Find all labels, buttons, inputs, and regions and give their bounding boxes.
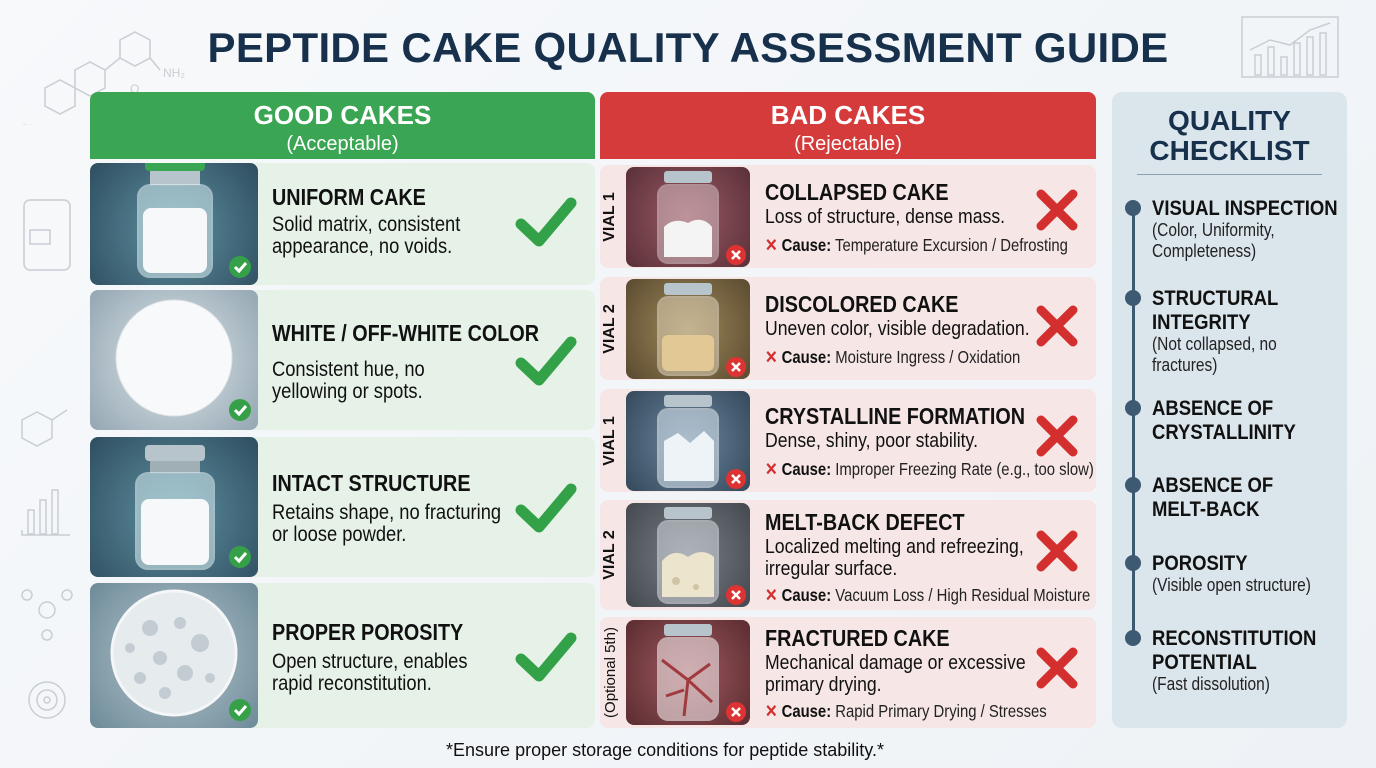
vial image: collapsed	[626, 167, 750, 267]
icon: check	[516, 484, 576, 532]
heading: MELT-BACK DEFECT	[765, 509, 965, 535]
panel: quality checklist: STRUCTURAL	[1152, 286, 1278, 310]
good row 1	[90, 163, 595, 285]
panel: quality checklist: POROSITY	[1152, 551, 1248, 575]
panel: quality checklist: (Color, Uniformity,	[1152, 220, 1275, 240]
vial label: (Optional 5th)	[602, 627, 619, 718]
item 5	[1125, 551, 1311, 595]
bad row 2	[600, 277, 1096, 380]
heading: COLLAPSED CAKE	[765, 179, 949, 205]
panel: quality checklist: (Not collapsed, no	[1152, 334, 1277, 354]
good row 3: Retains shape, no fracturing	[272, 500, 501, 524]
vial label: VIAL 1	[601, 416, 618, 465]
bad row 5: ✕ Cause: Rapid Primary Drying / Stresses	[765, 701, 1047, 721]
good row 1: appearance, no voids.	[272, 234, 452, 258]
bad row 3	[600, 389, 1096, 492]
header: good cakes	[90, 92, 595, 159]
heading: UNIFORM CAKE	[272, 184, 426, 210]
good row 3	[90, 437, 595, 577]
image: porous	[90, 583, 258, 728]
vial image: melt-back	[626, 503, 750, 607]
item 3	[1125, 396, 1296, 444]
panel: quality checklist: (Fast dissolution)	[1152, 674, 1270, 694]
bad row 3: Dense, shiny, poor stability.	[765, 429, 978, 452]
header: good cakes: GOOD CAKES	[254, 100, 431, 130]
icon: X	[1036, 530, 1078, 572]
panel: quality checklist: RECONSTITUTION	[1152, 626, 1316, 650]
icon: check	[516, 336, 576, 386]
bad row 4	[600, 500, 1096, 610]
image: white powder	[90, 290, 258, 430]
bad row 2: ✕ Cause: Moisture Ingress / Oxidation	[765, 347, 1020, 367]
footer note: *Ensure proper storage conditions for peptide stability.*	[446, 740, 884, 760]
bad row 2: Uneven color, visible degradation.	[765, 317, 1030, 340]
header: bad cakes: (Rejectable)	[794, 133, 902, 155]
icon: X	[1036, 648, 1078, 688]
panel: quality checklist: ABSENCE OF	[1152, 396, 1273, 420]
vial image: fractured	[626, 620, 750, 725]
bad row 5: Mechanical damage or excessive	[765, 651, 1026, 674]
vial image: crystalline	[626, 391, 750, 491]
heading: PROPER POROSITY	[272, 619, 463, 645]
heading: INTACT STRUCTURE	[272, 470, 471, 496]
good row 2	[90, 290, 595, 430]
title: PEPTIDE CAKE QUALITY ASSESSMENT GUIDE	[208, 24, 1168, 71]
panel: good cakes	[90, 92, 595, 159]
vial image: discolored	[626, 279, 750, 379]
panel: quality checklist	[1112, 92, 1347, 728]
heading: CRYSTALLINE FORMATION	[765, 403, 1025, 429]
checklist title: CHECKLIST	[1149, 135, 1310, 166]
bad row 4: Localized melting and refreezing,	[765, 535, 1024, 558]
good row 1: Solid matrix, consistent	[272, 212, 460, 236]
panel: quality checklist: VISUAL INSPECTION	[1152, 196, 1338, 220]
checklist title	[1149, 105, 1310, 166]
good row 4: rapid reconstitution.	[272, 671, 432, 695]
vial label: VIAL 2	[601, 530, 618, 580]
bad row 4: ✕ Cause: Vacuum Loss / High Residual Moisture	[765, 585, 1090, 605]
good row 4: Open structure, enables	[272, 649, 467, 673]
icon: X	[1036, 416, 1078, 456]
vial image: uniform	[90, 163, 258, 285]
panel: quality checklist: INTEGRITY	[1152, 310, 1251, 334]
bad row 5: primary drying.	[765, 673, 882, 696]
heading: DISCOLORED CAKE	[765, 291, 958, 317]
vial label: VIAL 2	[601, 304, 618, 353]
panel: quality checklist: Completeness)	[1152, 241, 1256, 261]
checklist title: QUALITY	[1168, 105, 1291, 136]
good row 3: or loose powder.	[272, 522, 406, 546]
item 2	[1125, 286, 1278, 375]
bad row 5	[600, 617, 1096, 728]
panel: quality checklist: CRYSTALLINITY	[1152, 420, 1296, 444]
panel: quality checklist: MELT-BACK	[1152, 497, 1260, 521]
good row 4	[90, 583, 595, 728]
panel: quality checklist: ABSENCE OF	[1152, 473, 1273, 497]
bad row 1	[600, 165, 1096, 268]
timeline	[1132, 207, 1135, 637]
good row 2: yellowing or spots.	[272, 379, 423, 403]
item 1	[1125, 196, 1338, 261]
bad row 4: irregular surface.	[765, 557, 897, 580]
panel: quality checklist: POTENTIAL	[1152, 650, 1257, 674]
panel: quality checklist: (Visible open structure)	[1152, 575, 1311, 595]
decorative molecule icon: NH₂	[163, 66, 185, 80]
icon: X	[1036, 190, 1078, 230]
item 6	[1125, 626, 1316, 694]
panel: quality checklist: fractures)	[1152, 355, 1217, 375]
vial image: intact	[90, 437, 258, 577]
bad row 1: ✕ Cause: Temperature Excursion / Defrosting	[765, 235, 1068, 255]
decorative chart icon	[1241, 16, 1339, 78]
header: good cakes: (Acceptable)	[286, 133, 399, 155]
icon: X	[1036, 306, 1078, 346]
decorative side icons	[21, 199, 73, 719]
header: bad cakes	[600, 92, 1096, 159]
header: bad cakes: BAD CAKES	[771, 100, 925, 130]
good row 2: Consistent hue, no	[272, 357, 425, 381]
item 4	[1125, 473, 1273, 521]
bad row 1: Loss of structure, dense mass.	[765, 205, 1005, 228]
heading: WHITE / OFF-WHITE COLOR	[272, 320, 539, 346]
heading: FRACTURED CAKE	[765, 625, 950, 651]
icon: check	[516, 632, 576, 682]
icon: check	[516, 198, 576, 246]
decorative molecule icon: O	[130, 82, 139, 96]
vial label: VIAL 1	[601, 192, 618, 241]
bad row 3: ✕ Cause: Improper Freezing Rate (e.g., too slow)	[765, 459, 1094, 479]
decorative molecule icon	[20, 31, 185, 125]
